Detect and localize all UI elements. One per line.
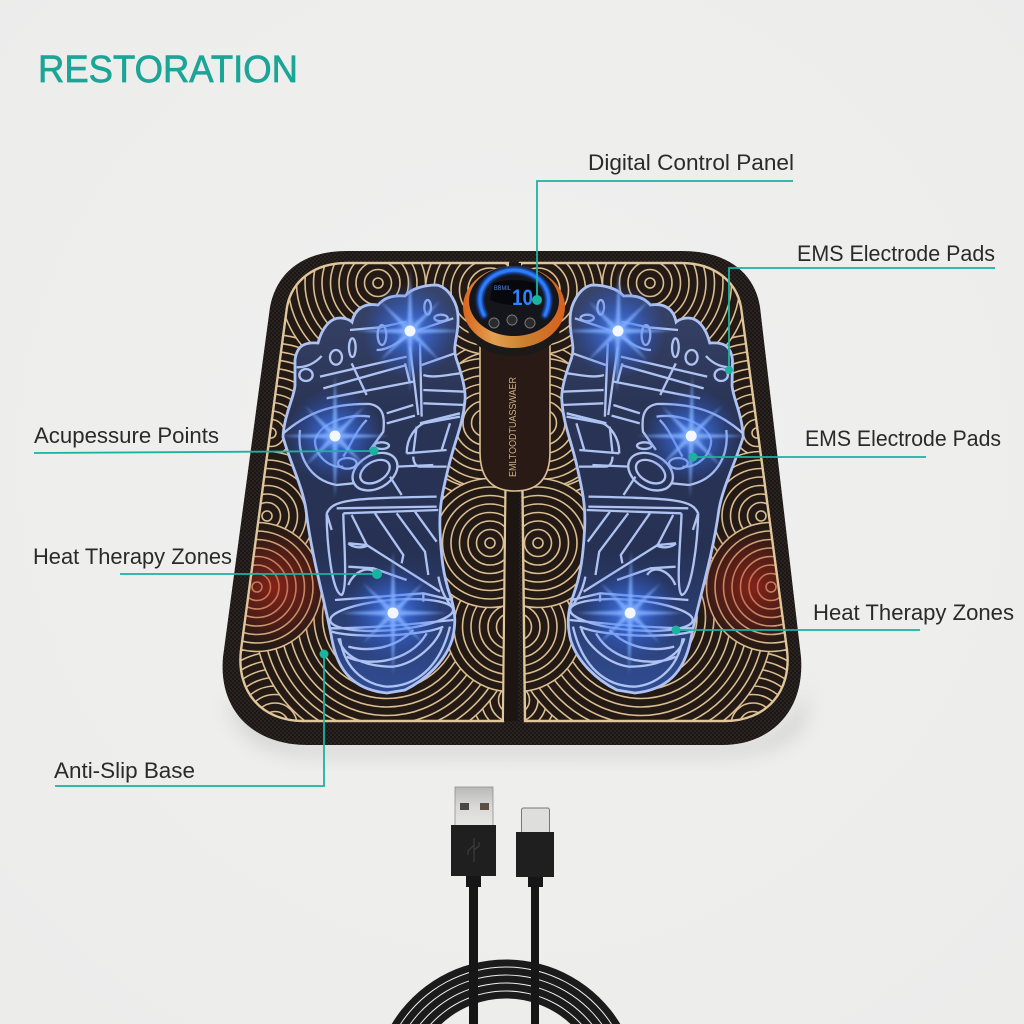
callout: EMS Electrode Pads top: [725, 241, 995, 374]
center strip: [504, 263, 521, 721]
callout: Anti-Slip Base: Anti-Slip Base: [54, 758, 195, 783]
cable coil: [392, 959, 620, 1024]
callout: Digital Control Panel: [532, 150, 794, 305]
callout: EMS Electrode Pads lower: [688, 426, 1001, 462]
mat base: [223, 251, 801, 745]
strip text: EMLTOODTUASSWAER: [507, 377, 519, 477]
lower foot lines: [327, 510, 454, 687]
callout: Heat Therapy Zones left: Heat Therapy Zones: [33, 544, 232, 569]
callout: Digital Control Panel: Digital Control Panel: [588, 150, 794, 175]
charging cable: [392, 787, 620, 1024]
digital control panel: [463, 266, 565, 356]
callout: Acupressure Points: Acupessure Points: [34, 423, 219, 448]
USB-A connector: [451, 787, 496, 1024]
base shadow: [468, 300, 560, 356]
buttons: [489, 315, 535, 328]
right foot outline: [557, 269, 748, 693]
title: RESTORATION: [38, 49, 298, 91]
glow: arch: [281, 374, 389, 498]
display window: [490, 280, 538, 305]
massage mat: [222, 251, 809, 760]
upper foot lines: [283, 300, 465, 530]
mat shadow: [226, 680, 806, 756]
callout: Heat Therapy Zones right: [672, 600, 1014, 634]
center label strip: [480, 340, 550, 491]
black disc: [469, 266, 559, 336]
gold ring: [463, 266, 565, 348]
callout: EMS Electrode Pads lower: EMS Electrode Pads: [805, 426, 1001, 451]
left pattern panel: [239, 262, 789, 722]
callout: Anti-Slip Base: [54, 650, 328, 786]
USB-C connector: [516, 808, 554, 1024]
blue arc glow: [480, 270, 549, 315]
callout: Heat Therapy Zones right: Heat Therapy Zones: [813, 600, 1014, 625]
callout: Acupressure Points: [34, 423, 378, 456]
small readout: BBMIL: [494, 286, 512, 292]
readout: 10: [512, 285, 533, 310]
blue arc: [480, 270, 549, 315]
right pattern panel: [406, 184, 856, 824]
glow: toe: [356, 269, 464, 393]
callout: Heat Therapy Zones left: [33, 544, 382, 579]
glow: heel: [339, 551, 447, 675]
callout: EMS Electrode Pads top: EMS Electrode Pads: [797, 241, 995, 266]
left foot outline: [281, 269, 465, 693]
